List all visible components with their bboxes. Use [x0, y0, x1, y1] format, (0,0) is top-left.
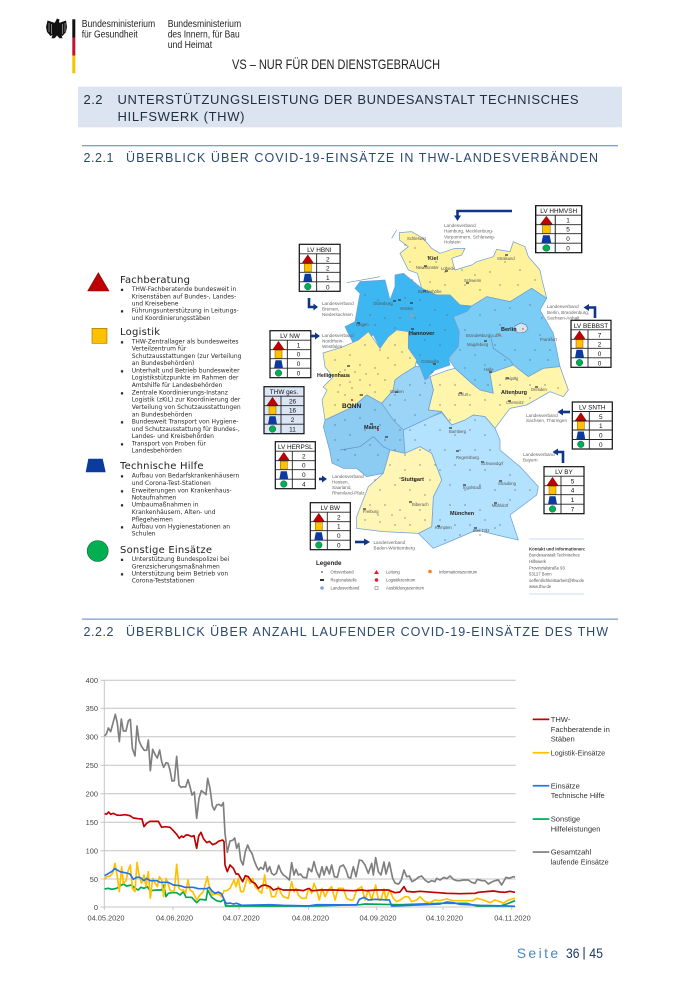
map: city names: Chemnitz	[506, 400, 524, 405]
text block: Fachberatung: und Koordinierungsstäben	[132, 315, 211, 322]
map: city names: München	[450, 511, 475, 517]
table: LV HBNI: 2	[326, 265, 330, 272]
arrow and label: Bremen, Niedersachsen: Landesverband	[322, 301, 354, 306]
chart legend: THW-	[551, 715, 571, 724]
arrow and label: Hamburg: Vorpommern, Schleswig-	[444, 234, 496, 240]
table: LV HERPSL: 0	[302, 463, 306, 470]
map regions	[322, 230, 568, 548]
y axis labels: 100	[86, 846, 98, 856]
arrow and label: Hamburg: Holstein	[444, 240, 461, 244]
table: LV HERPSL: 0	[302, 472, 306, 479]
arrow and label: Sachsen	[526, 408, 570, 423]
map: city names: Freiburg	[363, 509, 379, 514]
text block: Technische Hilfe: Notaufnahmen	[132, 494, 177, 501]
y axis labels: 250	[86, 761, 98, 770]
table: LV BY: 7	[571, 507, 575, 514]
map: city names: Dresden	[531, 387, 547, 392]
text block: Technische Hilfe: und Corona-Test-Stationen	[132, 480, 211, 487]
y axis labels: 200	[86, 790, 98, 798]
heading: Fachberatung: Fachberatung	[120, 275, 190, 286]
table: LV HHMVSH	[536, 206, 582, 253]
map: city names: Göttingen	[421, 359, 440, 364]
contact block: Bundesanstalt Technisches	[529, 553, 580, 558]
subheading 2.2.1	[82, 145, 618, 165]
map: city names: Leipzig	[505, 376, 519, 381]
y axis labels: 150	[86, 818, 98, 827]
table: LV HHMVSH: 0	[566, 246, 570, 252]
arrow and label: Bremen, Niedersachsen	[309, 298, 354, 317]
region: Hamburg, Mecklenburg-Vorpommern, Schleswig-Holstein	[399, 232, 547, 306]
map legend: Ortsverband	[330, 570, 354, 574]
section heading 2.2: HILFSWERK (THW)	[118, 109, 244, 124]
arrow and label: Bremen, Niedersachsen: Bremen,	[322, 306, 339, 312]
arrow and label: Berlin: Landesverband	[547, 304, 579, 309]
text block: Technische Hilfe: Aufbau von Bedarfskrankenhäusern	[132, 473, 239, 480]
chart legend	[533, 715, 610, 866]
text block: Technische Hilfe: Erweiterungen von Krankenhaus-	[132, 487, 232, 494]
text block: Logistik: ▪	[120, 340, 124, 345]
text block: Technische Hilfe: ▪	[120, 489, 124, 494]
table: THW gesamt: 2	[291, 417, 295, 424]
text block: Logistik: Logistik (zKiL) zur Koordinierung der	[132, 397, 241, 404]
table: THW gesamt: 26	[289, 399, 296, 406]
map: local office dots	[330, 245, 558, 540]
arrow and label: Hessen: Saarland,	[332, 485, 352, 490]
arrow and label: Nordrhein-Westfalen: Landesverband	[322, 333, 354, 338]
text block: Technische Hilfe: Krankenhäusern, Alten- und	[132, 509, 216, 516]
map: city names: Erfurt	[458, 392, 469, 397]
text block: Fachberatung: ▪	[120, 288, 124, 293]
region: Rheinland-Pfalz, Saarland	[323, 367, 442, 477]
table: LV BY: 4	[571, 488, 575, 495]
table: LV BW: 2	[337, 515, 341, 522]
text block: Technische Hilfe: ▪	[120, 525, 124, 530]
x axis labels	[88, 914, 531, 922]
region: Baden-Württemberg	[357, 447, 442, 533]
panel: legend of deployment types	[86, 273, 242, 585]
text block: Logistik: an Bundesbehörden)	[132, 360, 194, 367]
text block: Fachberatung: Krisenstäben auf Bundes-, Landes-	[132, 293, 236, 300]
text block: Technische Hilfe: Pflegeheimen	[132, 516, 173, 523]
x axis labels: 04.07.2020	[223, 914, 260, 922]
table: LV HHMVSH: LV HHMVSH	[540, 208, 577, 215]
text block: Logistik: Verteilung von Schutzausstattungen	[132, 404, 241, 411]
region: Nordrhein-Westfalen	[322, 330, 417, 420]
y axis labels	[86, 676, 98, 912]
region: Sachsen, Thüringen	[428, 365, 568, 428]
x axis labels: 04.09.2020	[360, 914, 396, 922]
text block: Logistik: ▪	[120, 421, 124, 426]
y axis labels: 300	[86, 732, 98, 742]
text block: Fachberatung: ▪	[120, 310, 124, 315]
chart legend: Fachberatende in	[551, 725, 610, 734]
map: city names: Bamberg	[449, 429, 467, 434]
page number: 45	[589, 945, 603, 961]
text block: Technische Hilfe: Aufbau von Hygienestationen an	[132, 523, 230, 530]
contact block: Kontakt und Informationen:	[529, 546, 586, 552]
text block: Sonstige Einsätze: Unterstützung Bundespolizei bei	[132, 556, 230, 563]
y axis labels: 0	[94, 903, 98, 912]
logo: federal eagle	[46, 18, 67, 38]
table: LV HHMVSH: 5	[566, 226, 570, 234]
x axis labels: 04.05.2020	[88, 914, 124, 922]
ministry name: interior: Bundesministerium	[168, 19, 241, 30]
chart legend: laufende Einsätze	[551, 858, 609, 866]
table: LV HBNI	[299, 244, 340, 291]
text block: Technische Hilfe: ▪	[120, 504, 124, 509]
icon: blue trapezoid	[86, 459, 106, 472]
page number: 36	[566, 945, 580, 961]
table: LV SNTH: 0	[599, 442, 603, 449]
text block: Technische Hilfe: Umbaumaßnahmen in	[132, 502, 199, 509]
table: THW gesamt: 16	[289, 408, 296, 415]
table: LV NW: LV NW	[280, 333, 301, 340]
table: LV BW: LV BW	[321, 505, 341, 512]
arrow and label: Sachsen: Landesverband	[526, 413, 558, 418]
map: city names: Straubing	[498, 481, 517, 486]
table: LV HBNI: LV HBNI	[307, 247, 332, 254]
text block: Logistik: ▪	[120, 442, 124, 447]
arrow and label: Baden-Württemberg: Baden-Württemberg	[374, 546, 415, 550]
ministry name: interior: des Innern, für Bau	[168, 29, 240, 40]
region: Hessen	[382, 367, 442, 430]
text block: Logistik: Amtshilfe für Landesbehörden	[132, 382, 223, 389]
icon: red triangle	[88, 273, 109, 291]
text block: Logistik: Bundesweit Transport von Hygiene-	[132, 419, 238, 426]
text block: Fachberatung: Führungsunterstützung in Leitungs-	[132, 308, 239, 315]
table: LV HERPSL: 2	[302, 454, 306, 461]
map: city names: Regensburg	[456, 455, 479, 460]
chart legend: Stäben	[551, 735, 575, 744]
map legend: Informationszentrum	[439, 570, 478, 574]
arrow and label: Nordrhein-Westfalen: Westfalen	[322, 344, 343, 349]
contact block: Provinzialstraße 93	[529, 565, 566, 570]
contact block: Hilfswerk	[529, 559, 547, 564]
map: Berlin and central sites	[351, 314, 528, 431]
series: Einsätze Technische Hilfe	[105, 869, 515, 906]
table: LV BW: 0	[337, 533, 341, 540]
arrow and label: Hessen: Rheinland-Pfalz	[332, 490, 365, 496]
ministry name: health: Bundesministerium	[82, 19, 155, 30]
text block: Fachberatung: THW-Fachberatende bundesweit in	[131, 286, 237, 293]
text block: Logistik: Landes- und Kreisbehörden	[132, 433, 214, 440]
table: LV HBNI: 1	[326, 275, 330, 282]
table: THW gesamt: THW ges.	[270, 389, 298, 396]
contact block: oeffentlichkeitsarbeit@thw.de	[529, 578, 585, 583]
region: Bremen, Niedersachsen	[345, 273, 472, 380]
arrow and label: Bayern: Bayern	[523, 458, 538, 462]
icon: yellow square	[92, 328, 107, 343]
table: LV BEBBST: 0	[598, 351, 602, 358]
map: city names: Magdeburg	[467, 342, 489, 347]
table: LV SNTH	[572, 402, 612, 449]
arrow and label: Hessen: Hessen,	[332, 480, 349, 484]
text block: Technische Hilfe	[120, 473, 239, 538]
arrow and label: Hessen: Landesverband	[332, 474, 364, 479]
text block: Sonstige Einsätze	[120, 556, 230, 585]
map: city names: Lingen	[356, 322, 369, 327]
map: city names: Verden	[400, 306, 414, 311]
arrow and label: Baden-Württemberg	[355, 538, 415, 550]
table: LV SNTH: LV SNTH	[579, 404, 606, 412]
table: LV BEBBST: 2	[598, 341, 602, 348]
text block: Logistik: an Bundesbehörden	[132, 411, 192, 418]
table: LV HERPSL: 4	[302, 482, 306, 489]
map: city names: Frankfurt	[540, 337, 558, 342]
x axis labels: 04.08.2020	[292, 914, 329, 922]
logo: black red gold bar	[72, 19, 75, 73]
table: LV NW: 0	[297, 361, 301, 368]
map: city names: Biberach	[412, 502, 429, 507]
text block: Sonstige Einsätze: ▪	[120, 573, 124, 578]
map: city names: Hannover	[409, 331, 435, 337]
heading: Sonstige Einsätze: Sonstige Einsätze	[120, 545, 212, 556]
region: Berlin, Brandenburg, Sachsen-Anhalt	[448, 288, 560, 393]
contact block: 53127 Bonn	[529, 572, 552, 577]
x axis labels: 04.10.2020	[426, 914, 463, 922]
map: city names: Oldenburg	[373, 301, 393, 306]
text block: Logistik: Transport von Proben für	[131, 440, 206, 447]
region: Bayern	[403, 413, 538, 548]
line chart: running deployments	[86, 676, 610, 922]
map: city names: Gießen	[390, 389, 404, 394]
map: city names: Neumünster	[416, 265, 439, 270]
ministry name: health	[82, 19, 155, 40]
map of Germany	[317, 230, 568, 548]
table: LV NW: 0	[297, 371, 301, 378]
table: LV BEBBST: 7	[598, 332, 602, 339]
text block: Logistik: Zentrale Koordinierungs-Instanz	[132, 389, 228, 396]
subheading 2.2.1: ÜBERBLICK ÜBER COVID-19-EINSÄTZE IN THW-LANDESVERBÄNDEN	[126, 151, 598, 165]
table: LV BEBBST: 0	[598, 360, 602, 367]
text block: Logistik: Verteilzentrum für	[132, 346, 187, 353]
arrow and label: Berlin: Sachsen-Anhalt	[547, 316, 580, 320]
classification line: VS – NUR FÜR DEN DIENSTGEBRAUCH	[232, 55, 440, 72]
chart legend: Sonstige	[551, 815, 580, 824]
map: city names: Mainz	[364, 425, 380, 431]
map: city names: Heiligenhaus	[317, 373, 350, 379]
map: city names: Stuttgart	[401, 477, 424, 483]
subheading 2.2.2: 2.2.2	[84, 625, 114, 639]
table: LV BW: 1	[337, 524, 341, 531]
table: LV BW	[310, 503, 350, 550]
text block: Technische Hilfe: Schulen	[132, 531, 156, 538]
section heading 2.2	[78, 87, 622, 127]
map legend: Ausbildungszentrum	[386, 586, 424, 590]
subheading 2.2.1: 2.2.1	[84, 151, 114, 165]
subheading 2.2.2: ÜBERBLICK ÜBER ANZAHL LAUFENDER COVID-19-EINSÄTZE DES THW	[126, 625, 608, 639]
text block: Fachberatung	[120, 286, 239, 322]
ministry name: interior	[168, 19, 241, 51]
table: LV HERPSL: LV HERPSL	[278, 444, 313, 451]
map: city names: Halle	[484, 367, 494, 372]
table: LV HBNI: 0	[326, 284, 330, 291]
map: city names: BONN	[342, 403, 361, 410]
ministry name: health: für Gesundheit	[82, 29, 138, 40]
text block: Sonstige Einsätze: Corona-Teststationen	[132, 578, 195, 585]
text block: Logistik: ▪	[120, 391, 124, 396]
table: LV BEBBST	[571, 320, 611, 367]
table: LV BY	[544, 467, 584, 514]
map legend: Leitung	[386, 570, 400, 574]
table: LV NW: 0	[297, 352, 301, 359]
text block: Logistik: Logistikstützpunkte im Rahmen der	[132, 375, 239, 382]
series: Logistik-Einsätze	[105, 862, 515, 903]
subheading 2.2.2	[82, 618, 618, 639]
table: LV HHMVSH: 1	[566, 218, 570, 224]
map: regional offices	[347, 255, 538, 528]
arrow and label: Hamburg	[444, 211, 512, 244]
table: LV BY: 5	[571, 479, 575, 486]
map legend: Regionalstelle	[330, 578, 357, 582]
text block: Logistik: ▪	[120, 369, 124, 374]
heading: Technische Hilfe: Technische Hilfe	[119, 461, 204, 472]
table: LV HBNI: 2	[326, 256, 330, 263]
map: city names: Ingolstadt	[463, 485, 482, 490]
map: city names: Altenburg	[501, 390, 527, 396]
map legend	[316, 560, 478, 590]
text block: Logistik: Landesbehörden	[132, 448, 182, 455]
chart legend: Logistik-Einsätze	[551, 748, 605, 758]
table: LV HERPSL	[275, 442, 315, 489]
map legend: Landesverband	[330, 586, 360, 590]
contact block	[529, 538, 586, 594]
map: city names: Bundeshöhe	[418, 289, 442, 294]
arrow and label: Berlin	[547, 304, 595, 320]
chart legend: Gesamtzahl	[551, 848, 592, 857]
arrow and label: Nordrhein-Westfalen: Nordrhein-	[322, 338, 344, 344]
text block: Logistik: Unterhalt und Betrieb bundesweiter	[132, 367, 240, 374]
x axis labels: 04.11.2020	[494, 914, 531, 922]
table: LV HHMVSH: 0	[566, 236, 570, 243]
arrow and label: Berlin: Berlin, Brandenburg,	[547, 310, 589, 315]
map: city names	[317, 236, 558, 533]
icon: green circle	[87, 540, 108, 562]
arrow and label: Sachsen: Sachsen, Thüringen	[526, 418, 567, 423]
map: city names: Lübeck	[441, 266, 455, 271]
text block: Logistik: THW-Zentrallager als bundesweites	[131, 338, 239, 345]
map: city names: Kiel	[428, 256, 439, 262]
table: LV BY: LV BY	[555, 469, 574, 476]
section heading 2.2: 2.2	[84, 92, 102, 107]
y axis labels: 350	[86, 704, 98, 713]
section heading 2.2: UNTERSTÜTZUNGSLEISTUNG DER BUNDESANSTALT TECHNISCHES	[118, 92, 579, 107]
table: THW gesamt: 11	[289, 427, 296, 434]
text block: Sonstige Einsätze: Unterstützung beim Betrieb von	[132, 571, 228, 578]
arrow and label: Baden-Württemberg: Landesverband	[374, 540, 406, 545]
map: city names: Brandenburg a.d.H.	[466, 333, 503, 338]
chart legend: Einsätze	[551, 782, 580, 790]
map: city names: Stralsund	[497, 256, 515, 261]
map legend: Legende	[316, 560, 342, 567]
y axis labels: 50	[90, 875, 98, 884]
chart legend: Technische Hilfe	[551, 791, 605, 800]
table: LV NW	[270, 331, 311, 378]
table: LV SNTH: 1	[599, 423, 603, 430]
y axis labels: 400	[86, 676, 98, 685]
table: LV BEBBST: LV BEBBST	[574, 323, 608, 330]
map legend: Logistikzentrum	[386, 578, 416, 582]
table: LV BW: 0	[337, 543, 341, 550]
arrow and label: Hamburg: Landesverband	[444, 223, 476, 228]
map: city names: Bad Tölz	[473, 528, 489, 533]
map: city names: Berlin	[501, 327, 517, 333]
arrow and label: Nordrhein-Westfalen	[311, 332, 354, 349]
map: city names: Mühldorf	[492, 503, 509, 508]
table: LV NW: 1	[297, 343, 301, 350]
text block: Technische Hilfe: ▪	[120, 475, 124, 480]
map: city names: Schwerin	[464, 278, 482, 283]
arrow and label: Bremen, Niedersachsen: Niedersachsen	[322, 312, 353, 317]
series: Gesamtzahl laufende Einsätze	[105, 714, 515, 885]
arrow and label: Bayern	[523, 448, 563, 463]
heading: Logistik: Logistik	[120, 327, 160, 338]
page number: Seite	[517, 945, 558, 961]
map: city names: Schwandorf	[481, 461, 504, 466]
series: THW-Fachberatende in Stäben	[105, 812, 515, 894]
x axis labels: 04.06.2020	[156, 914, 193, 922]
chart legend: Hilfeleistungen	[551, 824, 601, 834]
map: city names: Kempten	[435, 525, 452, 530]
arrow and label: Hessen	[319, 474, 365, 496]
text block: Fachberatung: und Kreisebene	[132, 301, 179, 308]
contact block: www.thw.de	[529, 584, 552, 589]
arrow and label: Bayern: Landesverband	[523, 452, 555, 457]
ministry name: interior: und Heimat	[168, 40, 212, 51]
table: LV SNTH: 0	[599, 432, 603, 440]
map: city names: Schleswig	[407, 236, 427, 241]
text block: Logistik: Schutzausstattungen (zur Verteilung	[132, 353, 242, 360]
table: LV BY: 1	[571, 497, 575, 504]
text block: Logistik: und Schutzausstattung für Bundes-,	[132, 426, 240, 433]
page number	[517, 945, 603, 961]
series: Sonstige Hilfeleistungen	[105, 884, 515, 906]
text block: Sonstige Einsätze: Grenzsicherungsmaßnahmen	[132, 563, 220, 570]
text block: Logistik	[120, 338, 242, 455]
table: LV SNTH: 5	[599, 414, 603, 421]
arrow and label: Hamburg: Hamburg, Mecklenburg-	[444, 228, 494, 234]
chart grid and axes	[100, 680, 516, 910]
text block: Sonstige Einsätze: ▪	[120, 558, 124, 563]
table: THW gesamt	[264, 387, 304, 434]
